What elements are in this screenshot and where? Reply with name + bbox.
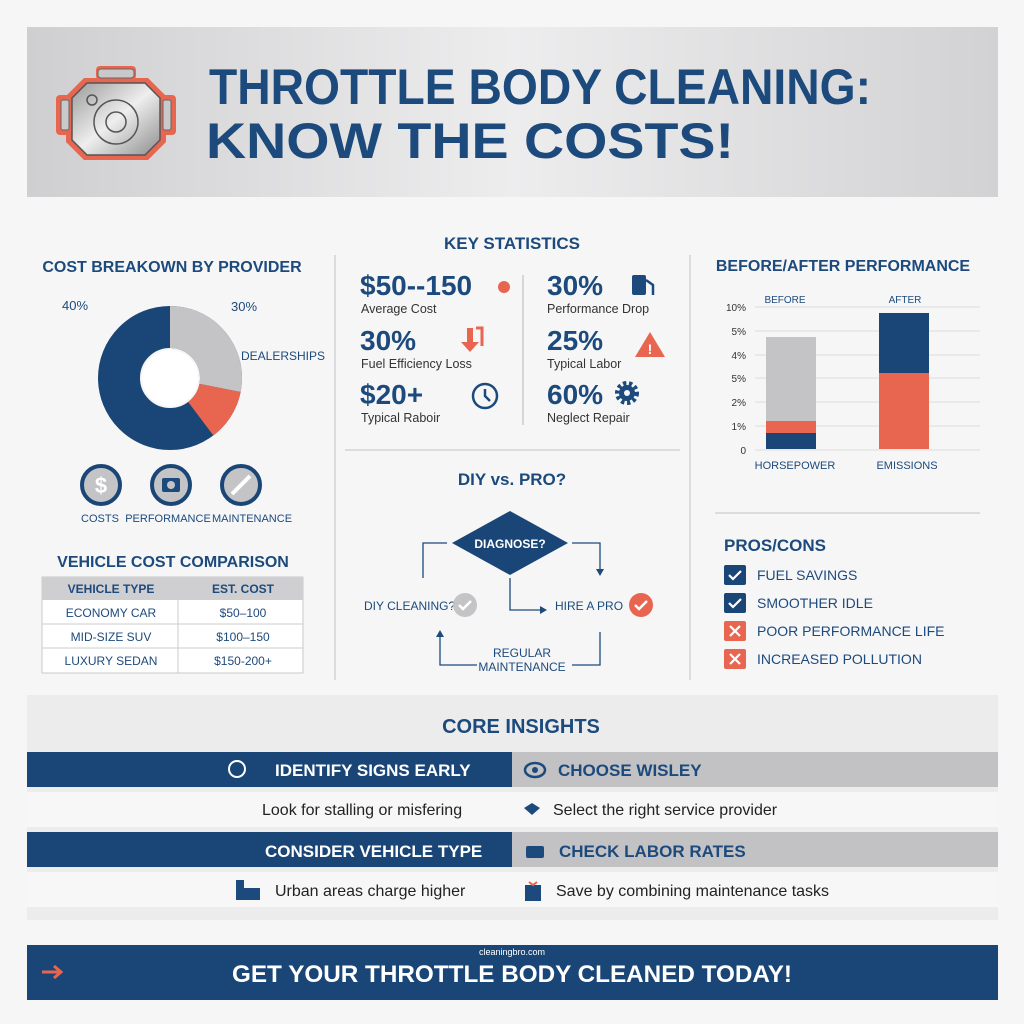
panel: before/after chart: 10% [726, 303, 746, 314]
donut chart: 30% [231, 299, 257, 314]
icons: stats [498, 281, 510, 293]
panel: key statistics: Typical Labor [547, 357, 621, 371]
panel: key statistics [360, 234, 665, 425]
panel: core insights: CONSIDER VEHICLE TYPE [265, 842, 482, 861]
panel: core insights: CHECK LABOR RATES [559, 842, 746, 861]
panel: core insights: CORE INSIGHTS [442, 716, 600, 738]
panel: key statistics: 30% [547, 270, 603, 301]
panel: core insights [27, 695, 998, 920]
panel: core insights: IDENTIFY SIGNS EARLY [275, 761, 471, 780]
panel: DIY vs PRO flowchart [364, 470, 653, 674]
icons row [81, 466, 292, 525]
icons: insights [229, 761, 245, 777]
panel: key statistics: KEY STATISTICS [444, 234, 580, 253]
panel: key statistics: Fuel Efficiency Loss [361, 357, 472, 371]
title [206, 59, 871, 169]
panel: before/after chart: BEFORE [764, 295, 806, 306]
panel: pros/cons: INCREASED POLLUTION [757, 651, 922, 667]
panel: pros/cons: PROS/CONS [724, 536, 826, 555]
panel: vehicle cost comparison: LUXURY SEDAN [65, 654, 157, 668]
panel: vehicle cost comparison: $150-200+ [214, 654, 272, 668]
panel: cost breakdown [42, 259, 325, 525]
panel: core insights: CHOOSE WISLEY [558, 761, 702, 780]
icons row: $ [95, 473, 107, 498]
panel: before/after chart: EMISSIONS [876, 460, 938, 472]
panel: DIY vs PRO flowchart: DIY CLEANING? [364, 599, 455, 613]
panel: core insights: Save by combining maintenance tasks [556, 883, 829, 900]
panel: before/after chart: 5% [732, 327, 746, 338]
panel: before/after chart: 1% [732, 422, 746, 433]
panel: pros/cons [724, 536, 944, 669]
panel: before/after chart: HORSEPOWER [755, 460, 835, 472]
banner: call to action: GET YOUR THROTTLE BODY CLEANED TODAY! [232, 961, 792, 988]
header banner [27, 27, 998, 197]
icons row: MAINTENANCE [212, 513, 292, 525]
panel: vehicle cost comparison: EST. COST [212, 582, 275, 596]
panel: key statistics: ! [648, 341, 652, 357]
panel: DIY vs PRO flowchart: DIY vs. PRO? [458, 470, 566, 489]
panel: vehicle cost comparison: MID-SIZE SUV [71, 630, 151, 644]
panel: DIY vs PRO flowchart: REGULAR [493, 646, 551, 660]
panel: before/after chart [716, 258, 980, 472]
icons row: PERFORMANCE [125, 513, 211, 525]
panel: before/after chart: 4% [732, 351, 746, 362]
panel: vehicle cost comparison: VEHICLE COST COMPARISON [57, 554, 289, 571]
panel: key statistics: Performance Drop [547, 302, 649, 316]
icons row: COSTS [81, 513, 119, 525]
panel: before/after chart: AFTER [889, 295, 921, 306]
banner: call to action [27, 945, 998, 1000]
banner: call to action: cleaningbro.com [479, 947, 545, 957]
title: THROTTLE BODY CLEANING: [209, 59, 871, 115]
panel: vehicle cost comparison [42, 554, 303, 673]
panel: vehicle cost comparison: VEHICLE TYPE [68, 582, 154, 596]
panel: core insights: Select the right service provider [553, 802, 778, 819]
panel: DIY vs PRO flowchart: MAINTENANCE [478, 660, 566, 674]
panel: cost breakdown: COST BREAKOWN BY PROVIDER [42, 259, 302, 276]
panel: before/after chart: BEFORE/AFTER PERFORMANCE [716, 258, 970, 275]
panel: before/after chart: 2% [732, 398, 746, 409]
donut chart: 40% [62, 298, 88, 313]
panel: DIY vs PRO flowchart: DIAGNOSE? [474, 537, 546, 551]
panel: pros/cons: FUEL SAVINGS [757, 567, 857, 583]
icon: engine [56, 66, 176, 160]
panel: core insights: Look for stalling or misfering [262, 802, 462, 819]
panel: DIY vs PRO flowchart: HIRE A PRO [555, 599, 623, 613]
panel: vehicle cost comparison: ECONOMY CAR [66, 606, 157, 620]
panel: core insights: Urban areas charge higher [275, 883, 466, 900]
panel: key statistics: Neglect Repair [547, 411, 630, 425]
panel: key statistics: 25% [547, 325, 603, 356]
donut chart: DEALERSHIPS [241, 349, 325, 363]
donut chart [62, 298, 325, 429]
panel: vehicle cost comparison: $50–100 [220, 606, 267, 620]
panel: before/after chart: 5% [732, 374, 746, 385]
panel: key statistics: Typical Raboir [361, 411, 440, 425]
panel: pros/cons: POOR PERFORMANCE LIFE [757, 623, 944, 639]
panel: key statistics: 30% [360, 325, 416, 356]
panel: key statistics: $20+ [360, 379, 423, 410]
panel: vehicle cost comparison: $100–150 [216, 630, 270, 644]
panel: before/after chart: 0 [740, 446, 746, 457]
title: KNOW THE COSTS! [206, 113, 734, 169]
panel: key statistics: $50--150 [360, 270, 472, 301]
panel: key statistics: Average Cost [361, 302, 437, 316]
panel: pros/cons: SMOOTHER IDLE [757, 595, 873, 611]
panel: key statistics: 60% [547, 379, 603, 410]
